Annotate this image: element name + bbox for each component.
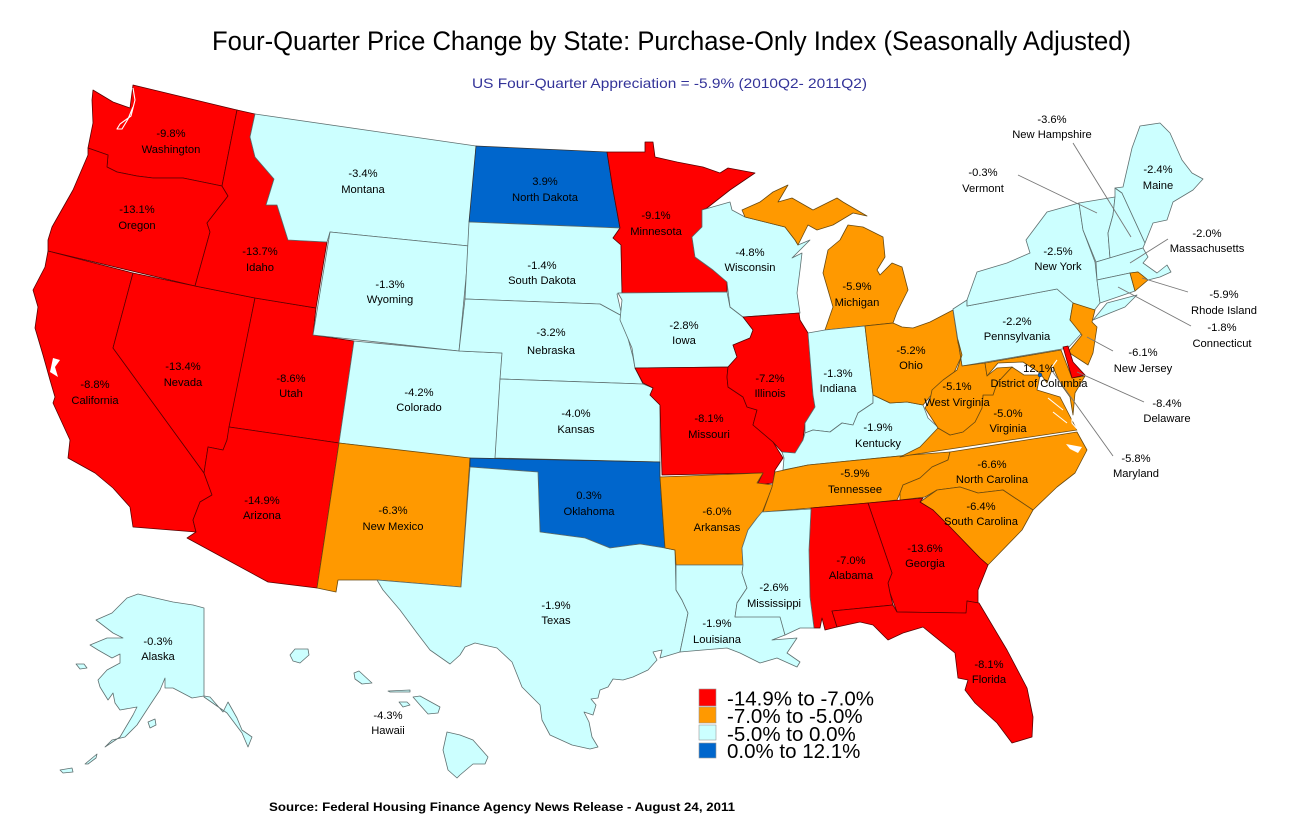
- Alaska islands: [76, 664, 87, 669]
- state: Alaska: [90, 594, 204, 747]
- state: Wisconsin: [692, 202, 810, 317]
- state: Pennsylvania: [953, 289, 1082, 366]
- label: Tennessee: -5.9%: [840, 468, 870, 480]
- source note: Source: Federal Housing Finance Agency News Release - August 24, 2011: [269, 800, 735, 814]
- label: Michigan: -5.9%: [842, 281, 872, 293]
- Alaska panhandle: [204, 696, 252, 747]
- state: Connecticut: [1097, 273, 1135, 303]
- label: Maine: Maine: [1143, 180, 1173, 192]
- label: Montana: -3.4%: [348, 168, 378, 180]
- state: Indiana: [805, 326, 873, 433]
- label: Mississippi: -2.6%: [759, 582, 789, 594]
- label: South Dakota: -1.4%: [527, 260, 557, 272]
- state: New Mexico: [317, 443, 470, 592]
- Hawaii: Molokai: [388, 690, 410, 692]
- label: North Dakota: 3.9%: [532, 176, 558, 188]
- label: Michigan: Michigan: [835, 297, 879, 309]
- state: Virginia: [900, 367, 1077, 457]
- leader lines for northeast states: [1018, 143, 1191, 456]
- state: Wyoming: [313, 232, 469, 351]
- label: Colorado: Colorado: [396, 402, 442, 414]
- state: Arkansas: [660, 473, 773, 565]
- state: North Dakota: [469, 146, 620, 228]
- label: Pennsylvania: -2.2%: [1002, 316, 1032, 328]
- state: Georgia: [868, 498, 988, 613]
- label: Colorado: -4.2%: [404, 387, 434, 399]
- Alaska Aleutian islands: [85, 754, 97, 764]
- state: Massachusetts: [1096, 248, 1171, 280]
- state: Oklahoma: [470, 458, 665, 548]
- label: Alaska: Alaska: [141, 651, 176, 663]
- legend item: -7.0% to -5.0%: -7.0% to -5.0%: [727, 705, 863, 728]
- label: Kansas: Kansas: [557, 424, 595, 436]
- label: Idaho: Idaho: [246, 262, 274, 274]
- label: New York: -2.5%: [1043, 246, 1073, 258]
- label: Nevada: Nevada: [164, 377, 203, 389]
- label: Washington: Washington: [142, 144, 200, 156]
- label: Maryland: Maryland: [1113, 468, 1159, 480]
- label: Montana: Montana: [341, 184, 386, 196]
- label: North Carolina: North Carolina: [956, 474, 1029, 486]
- label: Rhode Island: -5.9%: [1209, 289, 1239, 301]
- label: Illinois: Illinois: [754, 388, 786, 400]
- state: Michigan upper peninsula: [742, 185, 867, 245]
- label: Utah: Utah: [279, 388, 303, 400]
- label: Maryland: -5.8%: [1121, 453, 1151, 465]
- label: Idaho: -13.7%: [242, 246, 278, 258]
- legend: [699, 688, 874, 763]
- state: Maine: [1115, 123, 1203, 243]
- state: Iowa: [618, 292, 753, 368]
- label: North Carolina: -6.6%: [977, 459, 1007, 471]
- state: Missouri: [635, 367, 783, 485]
- label: Minnesota: Minnesota: [630, 226, 683, 238]
- label: Arizona: Arizona: [243, 510, 282, 522]
- label: Alabama: Alabama: [829, 570, 874, 582]
- label: Wyoming: Wyoming: [367, 294, 413, 306]
- state: Rhode Island: [1130, 272, 1148, 291]
- label: Massachusetts: Massachusetts: [1170, 243, 1245, 255]
- label: Georgia: -13.6%: [907, 543, 943, 555]
- label: Nebraska: Nebraska: [527, 345, 576, 357]
- legend item: -14.9% to -7.0%: -14.9% to -7.0%: [727, 688, 874, 710]
- label: Kentucky: Kentucky: [855, 438, 901, 450]
- Alaska far Aleutians: [60, 768, 73, 773]
- label: Wyoming: -1.3%: [375, 279, 405, 291]
- label: District of Columbia: 12.1%: [1023, 363, 1055, 375]
- label: Virginia: -5.0%: [993, 408, 1023, 420]
- state: Arizona: [187, 427, 339, 588]
- label: Pennsylvania: Pennsylvania: [984, 331, 1051, 343]
- label: Florida: -8.1%: [974, 659, 1004, 671]
- state: Mississippi: [735, 509, 814, 635]
- label: Connecticut: -1.8%: [1207, 322, 1237, 334]
- label: Washington: -9.8%: [156, 128, 186, 140]
- state: South Dakota: [465, 222, 622, 316]
- label: Oklahoma: Oklahoma: [564, 506, 615, 518]
- label: South Carolina: -6.4%: [966, 501, 996, 513]
- label: Missouri: -8.1%: [694, 413, 724, 425]
- label: Kansas: -4.0%: [561, 408, 591, 420]
- state: North Carolina: [900, 432, 1087, 510]
- label: Utah: -8.6%: [276, 373, 306, 385]
- label: Ohio: -5.2%: [896, 345, 926, 357]
- label: New Hampshire: -3.6%: [1037, 114, 1067, 126]
- legend item: 0.0% to 12.1%: 0.0% to 12.1%: [727, 740, 860, 763]
- label: Oregon: -13.1%: [119, 204, 155, 216]
- label: Mississippi: Mississippi: [747, 598, 801, 610]
- label: Georgia: Georgia: [905, 558, 946, 570]
- label: New Mexico: New Mexico: [363, 521, 423, 533]
- state: New Jersey: [1068, 303, 1097, 365]
- state: Ohio: [865, 310, 962, 405]
- label: New Jersey: New Jersey: [1114, 363, 1173, 375]
- state: Colorado: [339, 341, 502, 462]
- Hawaii: Lanai: [399, 702, 410, 707]
- label: Texas: Texas: [541, 615, 571, 627]
- label: Ohio: Ohio: [899, 360, 923, 372]
- label: Indiana: -1.3%: [823, 368, 853, 380]
- state: California: [33, 251, 212, 532]
- state: Minnesota: [607, 142, 755, 293]
- Hawaii: Maui: [413, 696, 440, 714]
- water: bays and sounds: [50, 88, 1082, 453]
- label: Vermont: -0.3%: [968, 167, 998, 179]
- state: Oregon: [48, 148, 228, 286]
- label: Illinois: -7.2%: [755, 373, 785, 385]
- label: West Virginia: West Virginia: [924, 397, 991, 409]
- label: New Mexico: -6.3%: [378, 505, 408, 517]
- Alaska Kodiak island: [148, 719, 156, 728]
- label: South Carolina: South Carolina: [944, 516, 1019, 528]
- state: Utah: [229, 298, 354, 443]
- map: state shapes: [33, 85, 1203, 778]
- state: Tennessee: [763, 452, 950, 512]
- label: South Dakota: South Dakota: [508, 275, 577, 287]
- label: Kentucky: -1.9%: [863, 422, 893, 434]
- label: Oregon: Oregon: [118, 220, 156, 232]
- label: New York: New York: [1034, 261, 1082, 273]
- state: Florida: [832, 601, 1033, 743]
- state: Nebraska: [459, 299, 643, 384]
- label: West Virginia: -5.1%: [942, 381, 972, 393]
- label: Alaska: -0.3%: [143, 636, 173, 648]
- state: Idaho: [195, 110, 327, 308]
- label: Arkansas: Arkansas: [694, 522, 741, 534]
- label: Connecticut: Connecticut: [1192, 338, 1252, 350]
- state: New Hampshire: [1108, 188, 1145, 258]
- label: Florida: Florida: [972, 674, 1007, 686]
- state: New York: [967, 203, 1100, 312]
- state: Vermont: [1079, 197, 1115, 262]
- label: Iowa: -2.8%: [669, 320, 699, 332]
- label: Maine: -2.4%: [1143, 164, 1173, 176]
- legend item: -5.0% to 0.0%: -5.0% to 0.0%: [727, 723, 856, 746]
- state: Delaware: [1063, 346, 1085, 378]
- label: California: California: [71, 395, 119, 407]
- state: Alabama: [809, 503, 893, 630]
- label: Louisiana: -1.9%: [702, 618, 732, 630]
- label: Vermont: Vermont: [962, 183, 1005, 195]
- Hawaii: Oahu: [354, 671, 372, 684]
- label: Tennessee: Tennessee: [828, 484, 882, 496]
- state: Michigan lower peninsula: [823, 225, 908, 330]
- label: Hawaii: Hawaii: [371, 725, 405, 737]
- state: New York, Long Island: [1093, 295, 1137, 320]
- label: Hawaii: -4.3%: [373, 710, 403, 722]
- label: New Hampshire: New Hampshire: [1012, 129, 1092, 141]
- label: Nevada: -13.4%: [165, 361, 201, 373]
- label: Wisconsin: -4.8%: [735, 247, 765, 259]
- label: Massachusetts: -2.0%: [1192, 228, 1222, 240]
- label: Arizona: -14.9%: [244, 495, 280, 507]
- label: Nebraska: -3.2%: [536, 327, 566, 339]
- label: Rhode Island: Rhode Island: [1191, 305, 1257, 317]
- label: Oklahoma: 0.3%: [576, 490, 602, 502]
- state: Louisiana: [676, 565, 800, 667]
- state: West Virginia: [925, 340, 1012, 435]
- marker: District of Columbia: [1038, 373, 1042, 377]
- label: Arkansas: -6.0%: [702, 506, 732, 518]
- state: Montana: [250, 114, 476, 246]
- label: Missouri: Missouri: [688, 429, 730, 441]
- state: Maryland: [985, 350, 1085, 415]
- label: Alabama: -7.0%: [836, 555, 866, 567]
- label: Louisiana: Louisiana: [693, 634, 742, 646]
- state: Kansas: [495, 379, 660, 462]
- state value labels: [71, 114, 1257, 737]
- label: District of Columbia: District of Columbia: [991, 378, 1088, 390]
- label: Minnesota: -9.1%: [641, 210, 671, 222]
- state: Nevada: [113, 273, 255, 473]
- state: South Carolina: [920, 487, 1033, 565]
- Hawaii: Kauai: [290, 649, 309, 663]
- label: Texas: -1.9%: [541, 600, 571, 612]
- label: Indiana: Indiana: [820, 383, 857, 395]
- label: Virginia: Virginia: [989, 423, 1027, 435]
- state: Illinois: [727, 313, 815, 453]
- label: Iowa: Iowa: [672, 335, 697, 347]
- subtitle: US appreciation: US Four-Quarter Appreciation = -5.9% (2010Q2- 2011Q2): [472, 75, 867, 91]
- label: Delaware: Delaware: [1143, 413, 1191, 425]
- state: Kentucky: [782, 395, 940, 470]
- state: Washington: [88, 85, 237, 186]
- label: Wisconsin: Wisconsin: [725, 262, 775, 274]
- title: Four-Quarter Price Change by State: Purchase-Only Index (Seasonally Adjusted): [212, 26, 1131, 56]
- label: North Dakota: North Dakota: [512, 192, 579, 204]
- Hawaii: Big Island: [443, 732, 488, 778]
- label: Delaware: -8.4%: [1152, 398, 1182, 410]
- label: California: -8.8%: [80, 379, 110, 391]
- state: Texas: [377, 467, 688, 749]
- label: New Jersey: -6.1%: [1128, 347, 1158, 359]
